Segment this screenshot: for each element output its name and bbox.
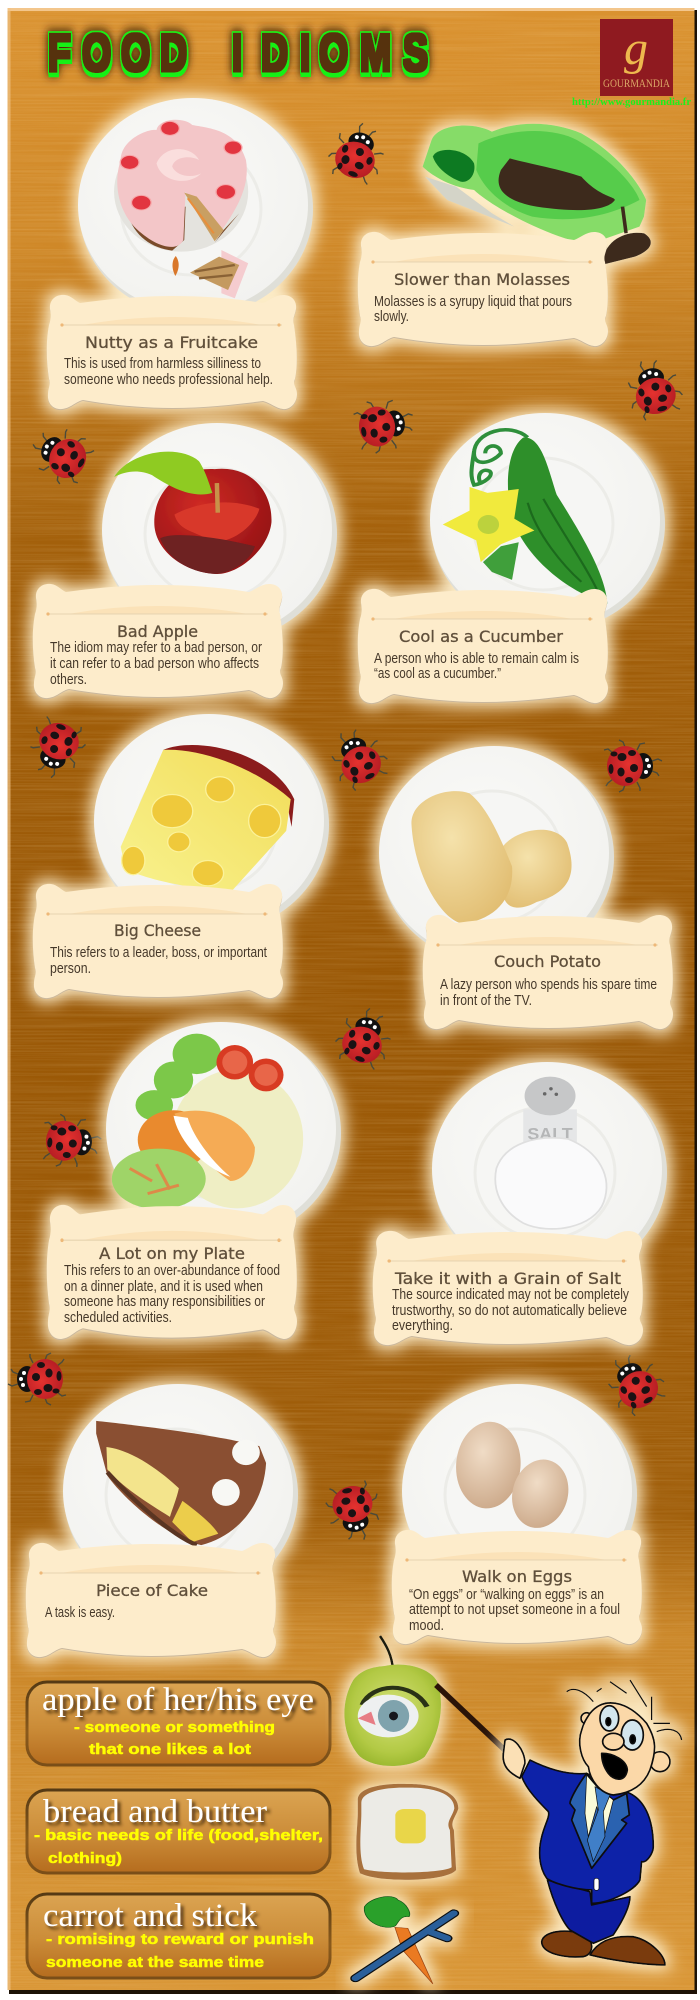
description: This refers to an over-abundance of food <box>64 1262 280 1279</box>
icon: cheese <box>121 745 294 890</box>
description: The source indicated may not be completely <box>392 1286 629 1303</box>
description: A task is easy. <box>45 1604 115 1621</box>
ladybug <box>41 1113 103 1170</box>
description <box>374 650 579 682</box>
banner <box>33 584 283 699</box>
description <box>64 355 273 388</box>
banner <box>26 1543 276 1658</box>
icon: fruitcake <box>114 120 248 298</box>
logo: Gourmandia: g <box>624 22 648 75</box>
icon: salt shaker: SALT <box>527 1124 573 1144</box>
plate <box>432 1062 667 1281</box>
icon: apple with eye <box>344 1636 441 1766</box>
box <box>27 1894 330 1978</box>
description <box>374 293 572 325</box>
description <box>64 1262 280 1326</box>
banner <box>392 1530 642 1645</box>
meaning <box>46 1931 314 1971</box>
panel: Take it with a Grain of Salt <box>373 1062 667 1346</box>
icon: salt shaker <box>495 1077 606 1229</box>
meaning: - romising to reward or punish <box>46 1931 314 1948</box>
description <box>50 639 262 688</box>
icon: bread and butter <box>356 1784 458 1880</box>
plate <box>106 1022 341 1241</box>
description <box>440 976 657 1009</box>
ladybug <box>352 394 418 456</box>
meaning: clothing) <box>48 1850 122 1867</box>
panel: Big Cheese <box>33 714 329 999</box>
plate <box>63 1384 298 1603</box>
ladybug <box>330 1001 399 1073</box>
icon: molasses bowl <box>423 124 651 265</box>
heading: Big Cheese <box>114 921 201 940</box>
description: person. <box>50 960 91 977</box>
banner <box>358 589 608 704</box>
description: in front of the TV. <box>440 992 532 1009</box>
banner <box>423 915 673 1030</box>
idiom: bread and butter <box>43 1794 267 1830</box>
ladybug <box>322 720 394 795</box>
description: slowly. <box>374 308 409 325</box>
box <box>27 1790 330 1873</box>
panel: Cool as a Cucumber <box>358 413 665 704</box>
plate <box>94 714 329 933</box>
description: The idiom may refer to a bad person, or <box>50 639 262 656</box>
description: someone has many responsibilities or <box>64 1293 265 1310</box>
icon: eggs <box>453 1420 575 1533</box>
panel: Piece of Cake <box>26 1384 298 1658</box>
heading: Walk on Eggs <box>462 1567 572 1586</box>
description: “On eggs” or “walking on eggs” is an <box>409 1586 604 1603</box>
heading: Slower than Molasses <box>394 270 570 289</box>
meaning: that one likes a lot <box>89 1741 251 1758</box>
heading: Bad Apple <box>117 622 198 641</box>
ladybug <box>597 1345 672 1421</box>
panel: Bad Apple <box>33 423 337 699</box>
plate <box>430 413 665 632</box>
ladybug <box>22 713 91 785</box>
illustration: professor <box>503 1680 682 1965</box>
panel: Couch Potato <box>379 746 673 1030</box>
panel: Walk on Eggs <box>392 1384 642 1645</box>
icon: cucumber <box>443 430 607 604</box>
description: This refers to a leader, boss, or important <box>50 944 268 961</box>
panel: Slower than Molasses <box>358 124 651 347</box>
icon: carrot and stick <box>356 1897 454 1984</box>
plate <box>102 423 337 642</box>
heading: Piece of Cake <box>96 1581 208 1600</box>
icon: potatoes <box>411 791 572 924</box>
banner <box>373 1231 643 1346</box>
meaning: - someone or something <box>74 1719 275 1736</box>
description: on a dinner plate, and it is used when <box>64 1278 263 1295</box>
description <box>392 1286 629 1334</box>
idiom: apple of her/his eye <box>42 1682 314 1718</box>
description: This is used from harmless silliness to <box>64 355 261 372</box>
panel: carrot and stick <box>27 1894 330 1978</box>
description: scheduled activities. <box>64 1309 172 1326</box>
heading: Cool as a Cucumber <box>399 627 563 646</box>
description: “as cool as a cucumber.” <box>374 665 501 682</box>
ladybug <box>621 353 686 423</box>
heading: Couch Potato <box>494 952 601 971</box>
icon: apple <box>114 452 272 574</box>
ladybug <box>323 1479 385 1545</box>
icon: cake slice <box>96 1421 266 1545</box>
panel: A Lot on my Plate <box>47 1022 341 1340</box>
plate <box>78 98 313 317</box>
logo url: http://www.gourmandia.fr <box>572 96 691 108</box>
banner <box>33 884 283 999</box>
description: someone who needs professional help. <box>64 371 273 388</box>
plate <box>402 1384 637 1603</box>
plate <box>379 746 614 965</box>
panel: bread and butter <box>27 1790 330 1873</box>
description: trustworthy, so do not automatically believe <box>392 1302 627 1319</box>
description: everything. <box>392 1317 453 1334</box>
meaning <box>74 1719 275 1758</box>
description <box>409 1586 620 1634</box>
heading: Take it with a Grain of Salt <box>394 1269 621 1288</box>
panel: apple of her/his eye <box>27 1682 330 1765</box>
meaning <box>34 1827 323 1867</box>
meaning: someone at the same time <box>46 1954 264 1971</box>
illustration: pointer stick <box>436 1685 510 1755</box>
panel: Nutty as a Fruitcake <box>47 98 313 410</box>
description: attempt to not upset someone in a foul <box>409 1601 620 1618</box>
logo: Gourmandia <box>600 19 673 96</box>
logo: Gourmandia: GOURMANDIA <box>603 76 670 90</box>
ladybug <box>8 1353 66 1405</box>
icon: dinner plate <box>112 1034 303 1209</box>
description: it can refer to a bad person who affects <box>50 655 259 672</box>
banner <box>358 232 608 347</box>
banner <box>47 1205 297 1340</box>
ladybug <box>323 116 392 188</box>
ladybug <box>23 417 99 492</box>
idiom: carrot and stick <box>43 1898 258 1934</box>
box <box>27 1682 330 1765</box>
banner <box>47 295 297 410</box>
title: FOOD IDIOMS <box>48 23 428 82</box>
description: A person who is able to remain calm is <box>374 650 579 667</box>
meaning: - basic needs of life (food,shelter, <box>34 1827 323 1844</box>
description: others. <box>50 671 87 688</box>
heading: A Lot on my Plate <box>99 1244 245 1263</box>
description: mood. <box>409 1617 444 1634</box>
description <box>50 944 268 977</box>
heading: Nutty as a Fruitcake <box>85 333 258 352</box>
description: Molasses is a syrupy liquid that pours <box>374 293 572 310</box>
ladybug <box>604 740 662 792</box>
